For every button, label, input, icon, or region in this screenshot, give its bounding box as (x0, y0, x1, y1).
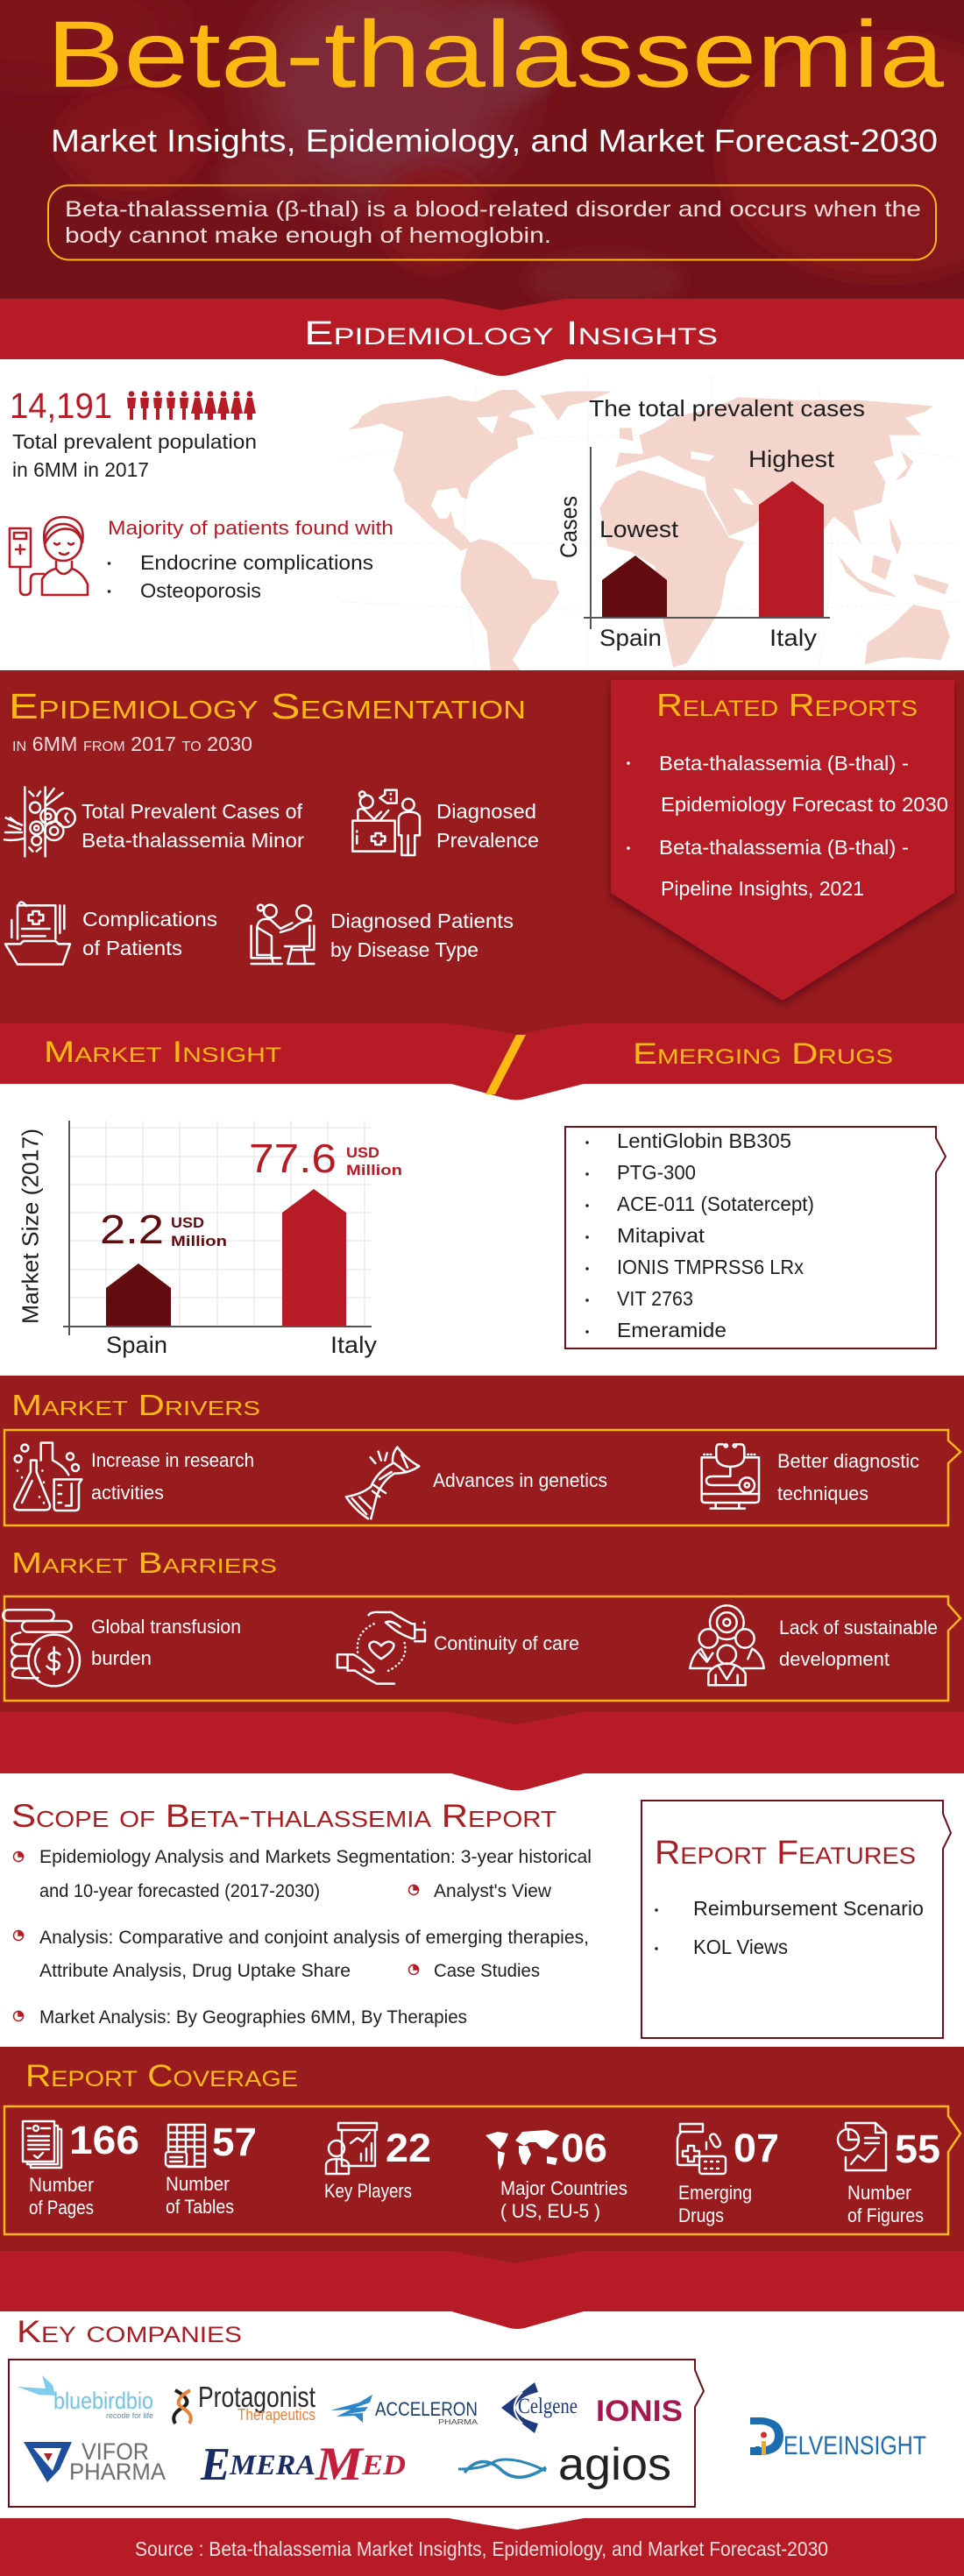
segment: complications of patients: Complications (82, 908, 217, 931)
panel: related reports: Beta-thalassemia (B-thal) - (659, 752, 909, 775)
panel: band above key companies (0, 2251, 964, 2329)
logo: Acceleron Pharma: ACCELERON (375, 2398, 478, 2420)
logo: IONIS: IONIS (596, 2395, 683, 2428)
panel: emerging drugs list: Emeramide (617, 1319, 727, 1341)
logo: Vifor Pharma: PHARMA (69, 2459, 166, 2485)
logo: Vifor Pharma: VIFOR (82, 2438, 149, 2465)
chart: market size: USD (346, 1144, 379, 1161)
segment: complications of patients: of Patients (82, 937, 182, 959)
heading: key companies: Key companies (17, 2315, 242, 2349)
panel: market barriers: Lack of sustainable (779, 1617, 938, 1638)
panel: band market insight and emerging drugs (0, 1023, 964, 1100)
icon: world (486, 2130, 559, 2170)
logo: bluebird bio (18, 2375, 153, 2420)
bullet icons (14, 1852, 419, 2020)
stat: prevalent population: 14,191 (10, 386, 112, 426)
logo: bluebird bio: recode for life (106, 2411, 153, 2420)
panel: related reports: Epidemiology Forecast to 2030 (661, 793, 948, 816)
icon: team with gear (690, 1605, 764, 1685)
panel: report coverage: Number (166, 2173, 230, 2195)
icon: medicine bottle (677, 2124, 726, 2174)
text block: majority of patients: Endocrine complications (140, 551, 373, 574)
panel: epidemiology segmentation (0, 670, 964, 1043)
panel: report coverage: 06 (561, 2126, 607, 2170)
panel: report coverage: Report Coverage (25, 2059, 298, 2093)
chart: total prevalent cases: Italy (769, 625, 818, 651)
panel: company logos (9, 2360, 704, 2507)
heading: Epidemiology Segmentation (9, 686, 526, 726)
panel: market drivers: Better diagnostic (777, 1450, 919, 1472)
chart: market size: Million (171, 1233, 227, 1249)
logo: EmeraMed: M (315, 2438, 365, 2490)
segment: diagnosed patients: by Disease Type (330, 938, 478, 961)
panel: related reports: Pipeline Insights, 2021 (661, 877, 864, 900)
chart: market size (18, 1121, 402, 1358)
segment: diagnosed patients (252, 905, 514, 964)
icon: figures (838, 2123, 886, 2170)
chart: market size: USD (171, 1214, 204, 1231)
subtitle: Market Insights, Epidemiology, and Market Forecast-2030 (51, 123, 938, 159)
panel: report coverage: 166 (69, 2118, 139, 2162)
panel: report coverage: ( US, EU-5 ) (500, 2200, 600, 2222)
callout: definition: Beta-thalassemia (β-thal) is a blood-related disorder and occurs when the (65, 197, 921, 222)
icon: people row (127, 391, 256, 420)
panel: source footer: Source : Beta-thalassemia Market Insights, Epidemiology, and Market Forecast-2030 (135, 2537, 828, 2560)
panel: band above scope (0, 1712, 964, 1791)
panel: report coverage: Number (29, 2174, 94, 2196)
panel: market barriers: development (779, 1648, 890, 1670)
segment: diagnosed patients: Diagnosed Patients (330, 909, 514, 932)
chart: market size: Italy (330, 1332, 378, 1358)
panel: related reports: Beta-thalassemia (B-thal) - (659, 836, 909, 859)
segment: diagnosed prevalence: Prevalence (436, 829, 539, 852)
panel: report coverage: 55 (895, 2127, 940, 2171)
panel: market insight white section (0, 1084, 964, 1376)
stat: prevalent population: Total prevalent population (12, 430, 257, 453)
bar: Spain (106, 1263, 171, 1326)
panel: emerging drugs list: LentiGlobin BB305 (617, 1129, 791, 1152)
panel: market barriers: Continuity of care (434, 1632, 579, 1654)
logo: Acceleron Pharma: PHARMA (438, 2418, 478, 2426)
panel: related reports: Related Reports (656, 687, 918, 723)
bar: Italy (282, 1189, 346, 1326)
panel: report coverage: of Pages (29, 2197, 94, 2219)
panel: market drivers: Market Drivers (11, 1389, 260, 1421)
stat: prevalent population: in 6MM in 2017 (12, 458, 149, 481)
panel: scope of report: and 10-year forecasted (2017-2030) (39, 1880, 320, 1901)
logo: Vifor Pharma (24, 2438, 166, 2485)
logo: DelveInsight: ELVEINSIGHT (783, 2431, 926, 2460)
panel: section band epidemiology insights (0, 299, 964, 376)
icon: medical folder (5, 902, 70, 965)
panel: market drivers: Increase in research (91, 1449, 254, 1471)
icon: monitor with stethoscope (702, 1444, 759, 1509)
panel: report features: KOL Views (693, 1936, 788, 1958)
panel: market barriers (3, 1546, 960, 1701)
segment: total prevalent cases (4, 787, 304, 856)
panel: market drivers: Advances in genetics (433, 1469, 607, 1491)
panel: related reports (611, 680, 954, 1001)
icon: doctor and patient (252, 905, 314, 964)
heading: Epidemiology Insights (304, 315, 718, 352)
icon: key players (326, 2123, 377, 2174)
panel: scope of report: Analysis: Comparative and conjoint analysis of emerging therapies, (39, 1927, 589, 1948)
panel: report coverage: Emerging (678, 2182, 752, 2204)
panel: report coverage: 07 (734, 2126, 779, 2170)
panel: emerging drugs list (565, 1127, 946, 1348)
icon: hands holding heart (337, 1612, 425, 1684)
logo: bluebird bio: bluebirdbio (53, 2388, 153, 2414)
icon: pages (23, 2121, 61, 2168)
chart: total prevalent cases: The total prevalent cases (589, 395, 865, 421)
logo: Protagonist Therapeutics: Protagonist (198, 2381, 315, 2413)
panel: emerging drugs list: ACE-011 (Sotatercept) (617, 1192, 814, 1215)
panel: emerging drugs list: PTG-300 (617, 1161, 696, 1184)
icon: flasks (14, 1443, 82, 1511)
panel: report coverage: Number (847, 2182, 911, 2204)
divider slash (486, 1035, 526, 1094)
panel: scope of report: Case Studies (434, 1960, 540, 1981)
panel: market barriers: Market Barriers (11, 1546, 277, 1579)
segment: diagnosed prevalence: Diagnosed (436, 800, 536, 823)
chart: total prevalent cases: Lowest (599, 516, 679, 542)
panel: scope of report: Attribute Analysis, Drug Uptake Share (39, 1960, 351, 1981)
chart: market size: 2.2 (100, 1207, 164, 1252)
panel: emerging drugs list: Mitapivat (617, 1224, 705, 1247)
icon: tree of cells (4, 787, 75, 856)
callout: definition: body cannot make enough of hemoglobin. (65, 223, 551, 248)
logo: agios: agios (558, 2439, 671, 2490)
panel: report coverage: 22 (386, 2126, 431, 2170)
panel: market drivers: activities (91, 1482, 164, 1504)
panel: epidemiology segmentation: in 6MM from 2017 to 2030 (12, 732, 252, 755)
logo: Protagonist Therapeutics: Therapeutics (237, 2406, 315, 2424)
logo: Celgene: Celgene (518, 2395, 578, 2418)
panel: report coverage: of Figures (847, 2204, 924, 2226)
panel: market drivers (4, 1389, 960, 1525)
logo: Protagonist Therapeutics (174, 2381, 315, 2424)
chart: market size: Million (346, 1162, 402, 1178)
icon: table (166, 2125, 205, 2167)
segment: total prevalent cases: Beta-thalassemia Minor (82, 829, 304, 852)
icon: reception desk (352, 790, 420, 855)
icon: DNA helix (346, 1447, 419, 1518)
panel: market drivers and barriers (0, 1376, 964, 1730)
chart: market size: Market Size (2017) (18, 1129, 44, 1324)
panel: report features: Report Features (655, 1835, 916, 1872)
panel: header background (0, 0, 964, 317)
panel: report coverage: 57 (212, 2120, 257, 2164)
logo: EmeraMed: ED (361, 2450, 406, 2481)
panel: band market insight and emerging drugs: Emerging Drugs (633, 1037, 893, 1071)
panel: report features: Reimbursement Scenario (693, 1897, 924, 1920)
panel: scope of report: Market Analysis: By Geographies 6MM, By Therapies (39, 2006, 467, 2028)
logo: DelveInsight (750, 2417, 926, 2460)
chart: market size: 77.6 (249, 1136, 337, 1181)
segment: complications of patients (5, 902, 217, 965)
panel: report features (641, 1801, 951, 2038)
segment: total prevalent cases: Total Prevalent Cases of (82, 800, 302, 823)
segment: diagnosed prevalence (352, 790, 539, 855)
panel: report coverage: of Tables (166, 2196, 234, 2218)
callout: definition (48, 186, 936, 259)
panel: report coverage: Drugs (678, 2204, 724, 2226)
text block: majority of patients: Osteoporosis (140, 579, 261, 602)
panel: band market insight and emerging drugs: Market Insight (44, 1036, 281, 1069)
panel: scope of report: Epidemiology Analysis and Markets Segmentation: 3-year historical (39, 1846, 592, 1867)
panel: market barriers: burden (91, 1647, 152, 1669)
chart: total prevalent cases: Highest (748, 446, 835, 472)
bar: Spain (602, 556, 667, 617)
panel: emerging drugs list: VIT 2763 (617, 1287, 693, 1310)
panel: epidemiology insights (0, 359, 964, 673)
bar: Italy (759, 481, 824, 617)
panel: report coverage: Major Countries (500, 2177, 627, 2199)
logo: EmeraMed: E (200, 2439, 230, 2490)
panel: scope of report (11, 1798, 592, 2028)
panel: report coverage: Key Players (324, 2180, 412, 2202)
world map (342, 377, 960, 672)
panel: scope of report: Analyst's View (434, 1880, 551, 1901)
chart: total prevalent cases (556, 395, 865, 651)
logo: EmeraMed: MERA (229, 2450, 315, 2481)
panel: report coverage (0, 2047, 964, 2268)
text block: majority of patients: Majority of patients found with (108, 517, 393, 539)
chart: market size: Spain (106, 1332, 167, 1358)
logo: EmeraMed (200, 2438, 406, 2490)
icon: patient with IV drip (10, 517, 88, 595)
logo: Celgene (501, 2382, 578, 2433)
panel: scope of report: Scope of Beta-thalassemia Report (11, 1798, 556, 1834)
icon: coins (3, 1610, 80, 1686)
panel: market drivers: techniques (777, 1483, 868, 1504)
stat: prevalent population (10, 386, 257, 481)
text block: majority of patients (108, 517, 393, 602)
chart: total prevalent cases: Cases (556, 496, 582, 558)
panel: emerging drugs list: IONIS TMPRSS6 LRx (617, 1256, 804, 1278)
chart: total prevalent cases: Spain (599, 625, 662, 651)
logo: Acceleron Pharma (330, 2395, 478, 2426)
panel: market barriers: Global transfusion (91, 1616, 241, 1638)
title: Beta-thalassemia (46, 1, 945, 107)
logo: agios (458, 2439, 671, 2490)
panel: source footer (0, 2518, 964, 2576)
